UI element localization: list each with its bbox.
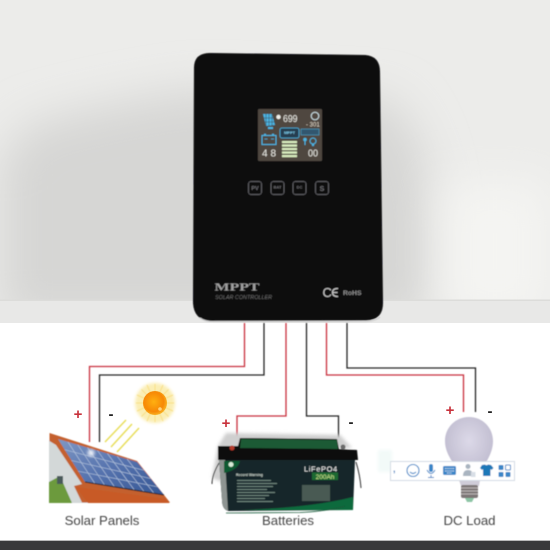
battery warning text [236, 473, 277, 502]
green swoosh [240, 497, 353, 510]
battery model label: LiFePO4 [304, 464, 338, 474]
controller device [193, 53, 383, 322]
roof [50, 433, 170, 502]
icon: clock [311, 112, 319, 120]
battery model label: 200Ah [316, 474, 335, 481]
icon: light bulb [445, 417, 493, 502]
panel cell grid [65, 442, 157, 493]
icon: sun beams [105, 420, 139, 452]
icon: solar panels on roof [49, 433, 170, 503]
icon: battery [212, 433, 361, 513]
photo background: wall and shelf [0, 0, 550, 323]
polarity signs: + [446, 402, 455, 419]
battery spec table [302, 485, 330, 501]
lower roof tiles [76, 487, 170, 503]
wire: solar negative [100, 323, 264, 442]
battery body [219, 460, 355, 511]
battery value: 48 [262, 148, 276, 160]
battery shadow [212, 433, 352, 482]
touch buttons: PV [251, 186, 259, 192]
polarity signs: - [348, 414, 354, 431]
battery level bars [282, 141, 297, 157]
icon: battery on screen [262, 134, 276, 144]
punctuation glyphs: , [393, 464, 396, 474]
touch buttons: DC [297, 184, 302, 190]
icon: t-shirt [480, 464, 494, 476]
polarity signs: + [74, 406, 83, 423]
wires [90, 323, 476, 442]
icon: smiley [407, 464, 419, 476]
touch buttons: BAT [274, 184, 282, 190]
certification marks: RoHS [343, 290, 362, 297]
wire: solar positive [90, 323, 244, 442]
status box [301, 129, 319, 135]
icon: sun dot [276, 115, 281, 119]
icon: microphone [427, 464, 435, 478]
certification marks: C [322, 285, 332, 300]
label: batteries: Batteries [262, 513, 314, 528]
polarity signs: - [488, 403, 492, 420]
label: DC load: DC Load [443, 513, 496, 528]
icon: bulb on screen [310, 138, 316, 146]
brand text [214, 282, 272, 301]
battery logo panel [224, 461, 240, 473]
brand text: SOLAR CONTROLLER [215, 295, 272, 301]
wire: load negative [347, 323, 476, 412]
icon: pin [303, 138, 307, 145]
polarity signs [74, 402, 492, 432]
wire: battery negative [306, 323, 338, 438]
label: solar panels: Solar Panels [65, 513, 140, 528]
wire: battery positive [237, 323, 286, 438]
PV value: 699 [283, 113, 298, 125]
LCD display [258, 109, 322, 161]
battery cables [212, 462, 361, 488]
bulb screw base [461, 485, 478, 498]
panel array [58, 439, 164, 495]
wire: load positive [326, 323, 464, 412]
battery model label [304, 464, 338, 481]
battery lid [218, 438, 358, 460]
brand text: MPPT [214, 282, 260, 294]
polarity signs: - [108, 406, 114, 423]
load value: 00 [308, 148, 318, 160]
time value: - 301 [306, 122, 320, 128]
touch buttons: S [320, 186, 325, 193]
MPPT badge: MPPT [284, 130, 296, 135]
bottom dark bar [0, 540, 550, 550]
keyboard toolbar overlay [378, 450, 514, 480]
icon: sun [135, 383, 175, 423]
certification marks [322, 285, 362, 300]
polarity signs: + [222, 415, 231, 432]
icon: keyboard [443, 466, 456, 475]
icon: user settings [463, 464, 476, 477]
icon: solar panel on screen [263, 114, 275, 129]
house wall [49, 440, 110, 503]
icon: apps grid [498, 465, 510, 477]
device body [193, 53, 383, 321]
battery warning text: Record Warning [236, 473, 263, 477]
touch buttons [248, 182, 328, 194]
